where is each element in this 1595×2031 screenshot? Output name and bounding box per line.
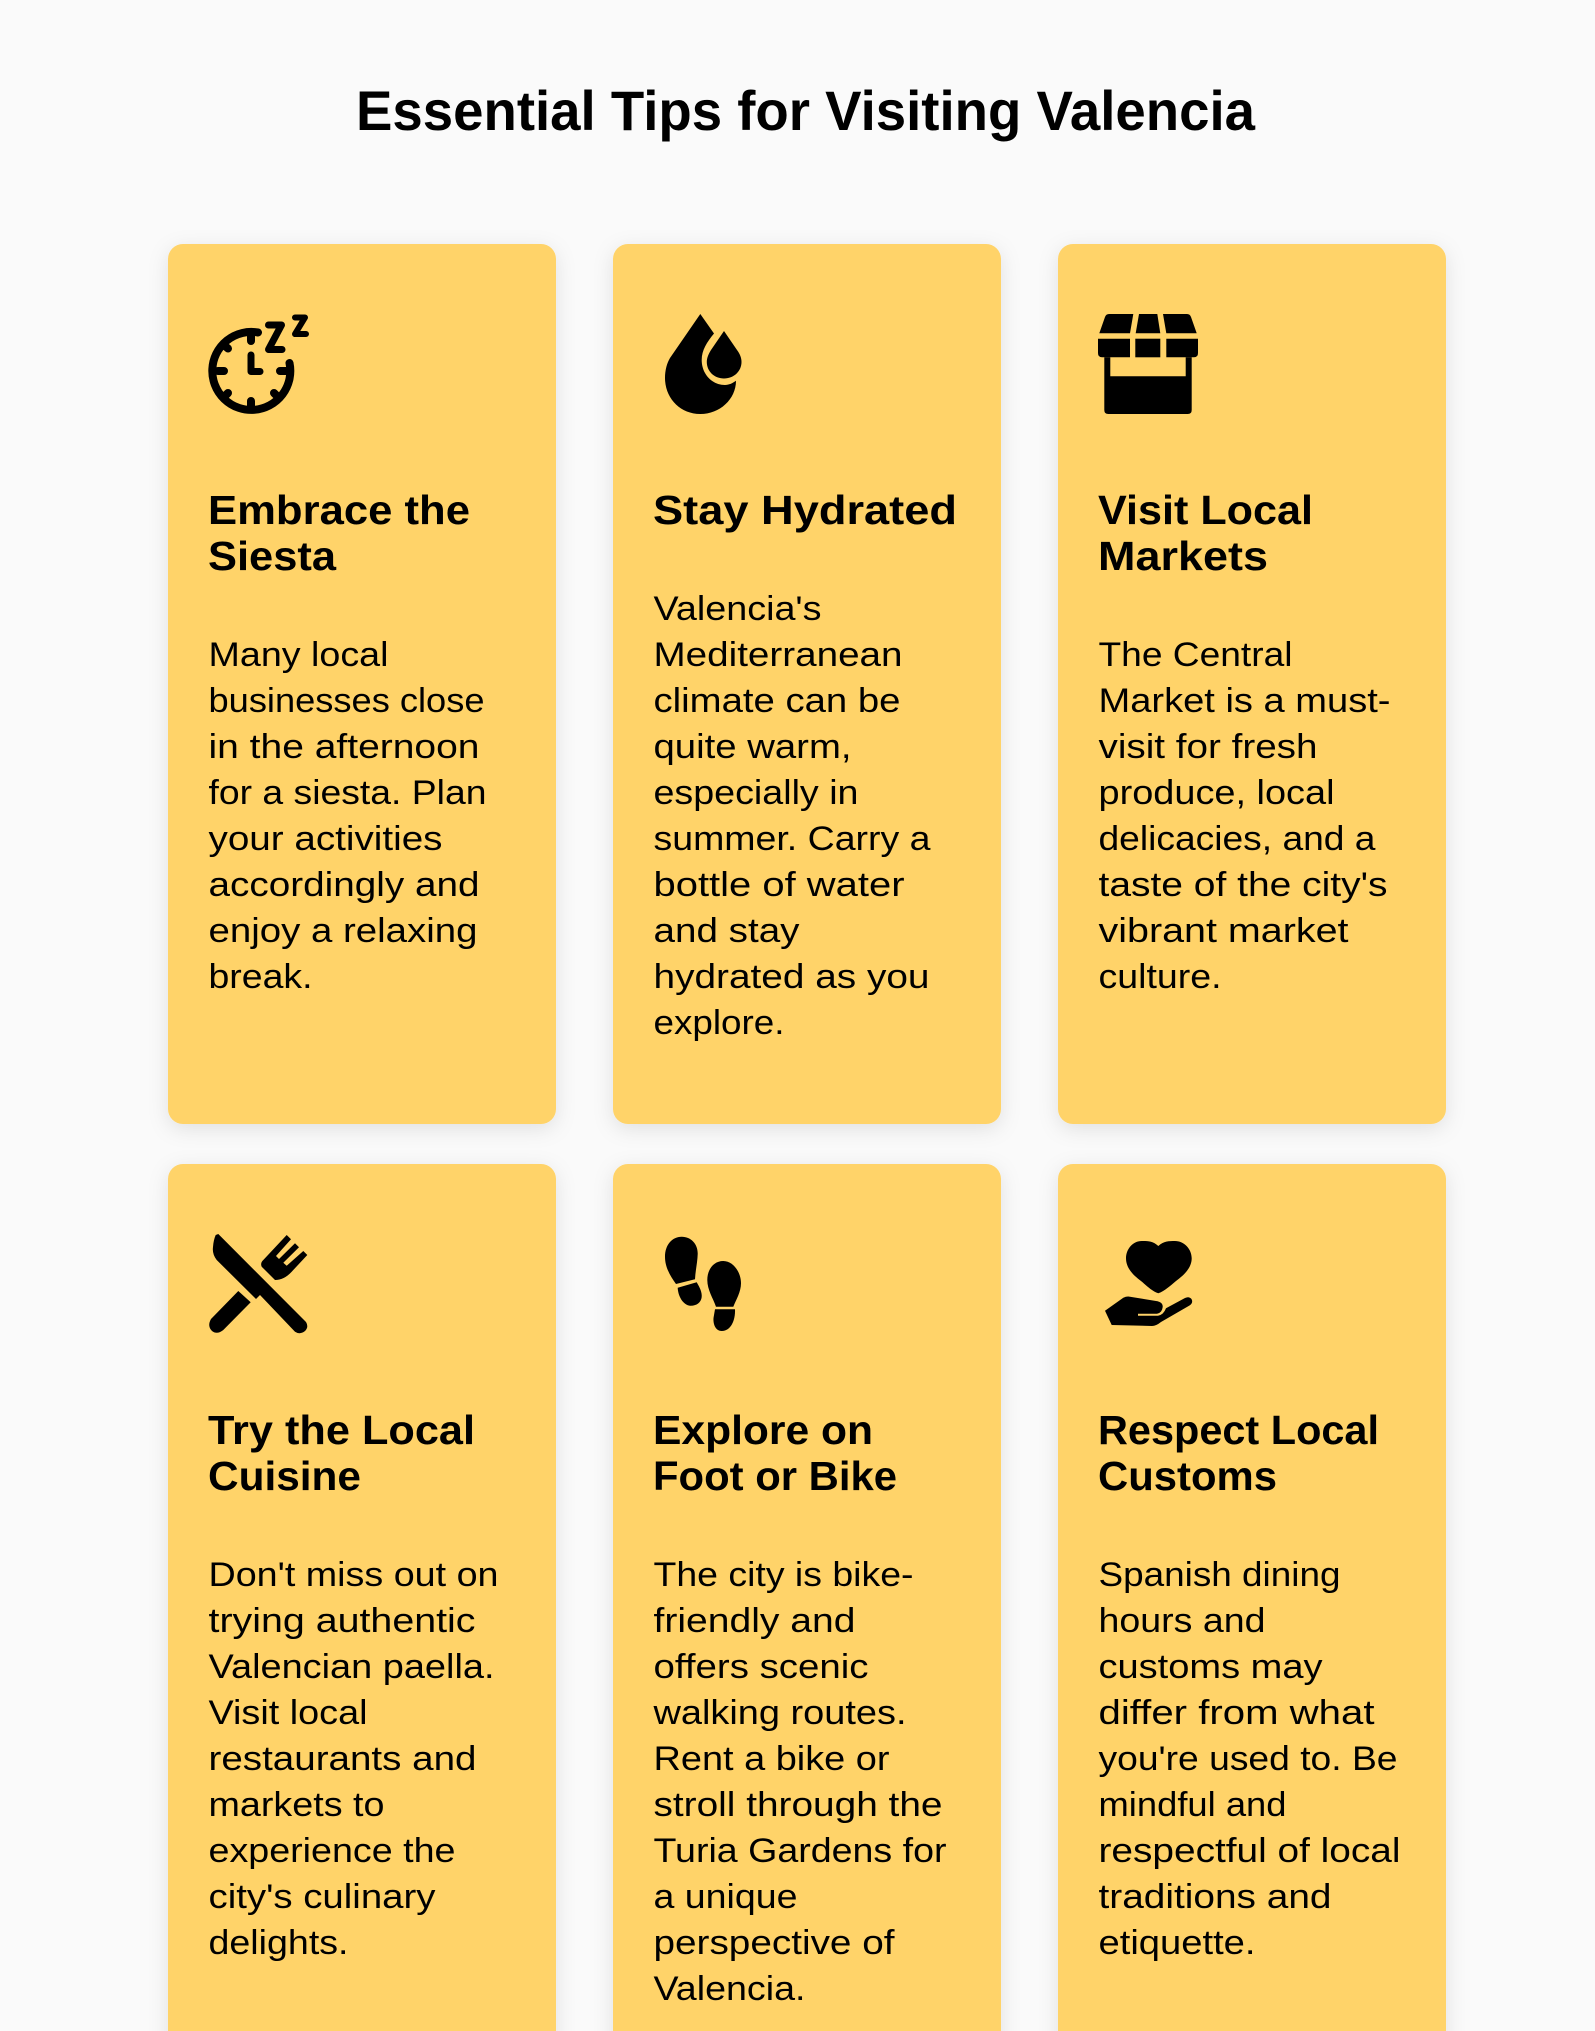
panel: Embrace the Siesta xyxy=(168,244,556,1124)
body text: The Central xyxy=(1098,636,1292,674)
heading xyxy=(1098,487,1313,579)
body text: you're used to. Be xyxy=(1098,1740,1398,1778)
body text: Valencian paella. xyxy=(208,1648,494,1686)
icon: heart in hand xyxy=(1105,1241,1192,1326)
heading xyxy=(653,1407,897,1499)
heading: Respect Local xyxy=(1098,1407,1379,1453)
body text: summer. Carry a xyxy=(654,820,931,858)
body text: delicacies, and a xyxy=(1098,820,1376,858)
body text: Visit local xyxy=(208,1694,368,1732)
body text: experience the xyxy=(208,1832,456,1870)
heading: Stay Hydrated xyxy=(653,487,957,533)
heading: Embrace the xyxy=(208,487,470,533)
body text: for a siesta. Plan xyxy=(208,774,486,812)
body text xyxy=(652,1556,946,2008)
body text: friendly and xyxy=(654,1602,856,1640)
body text: traditions and xyxy=(1098,1878,1332,1916)
body text: trying authentic xyxy=(208,1602,476,1640)
heading: Try the Local xyxy=(208,1407,475,1453)
body text: Rent a bike or xyxy=(654,1740,890,1778)
body text: climate can be xyxy=(654,682,900,720)
body text xyxy=(654,590,931,1042)
title: Essential Tips for Visiting Valencia xyxy=(356,79,1256,142)
body text: explore. xyxy=(654,1004,784,1042)
body text: Valencia. xyxy=(654,1970,806,2008)
body text: produce, local xyxy=(1098,774,1334,812)
heading xyxy=(1098,1407,1379,1499)
body text: visit for fresh xyxy=(1098,728,1318,766)
body text: Mediterranean xyxy=(654,636,902,674)
icon: water drops xyxy=(665,314,742,414)
icon: clock with zzz xyxy=(212,318,306,410)
body text xyxy=(1098,1556,1400,1962)
body text xyxy=(208,1556,498,1962)
body text: stroll through the xyxy=(654,1786,942,1824)
body text: walking routes. xyxy=(652,1694,906,1732)
body text: differ from what xyxy=(1098,1694,1375,1732)
body text: markets to xyxy=(208,1786,384,1824)
body text: Market is a must- xyxy=(1098,682,1390,720)
body text: culture. xyxy=(1098,958,1222,996)
icon: footprints xyxy=(665,1237,741,1331)
panel: Respect Local Customs xyxy=(1058,1164,1446,2031)
body text: in the afternoon xyxy=(208,728,480,766)
body text: Valencia's xyxy=(654,590,822,628)
panel: Visit Local Markets xyxy=(1058,244,1446,1124)
body text: respectful of local xyxy=(1098,1832,1400,1870)
body text: accordingly and xyxy=(208,866,480,904)
body text: and stay xyxy=(654,912,800,950)
body text: vibrant market xyxy=(1098,912,1349,950)
heading: Foot or Bike xyxy=(653,1453,897,1499)
heading: Customs xyxy=(1098,1453,1277,1499)
body text: Spanish dining xyxy=(1098,1556,1340,1594)
panel: Stay Hydrated xyxy=(613,244,1001,1124)
heading: Cuisine xyxy=(208,1453,361,1499)
body text: Don't miss out on xyxy=(208,1556,498,1594)
body text: offers scenic xyxy=(654,1648,868,1686)
body text: enjoy a relaxing xyxy=(208,912,478,950)
body text: your activities xyxy=(208,820,442,858)
heading xyxy=(208,1407,475,1499)
body text: delights. xyxy=(208,1924,348,1962)
panel: Explore on Foot or Bike xyxy=(613,1164,1001,2031)
body text: customs may xyxy=(1098,1648,1322,1686)
body text: break. xyxy=(208,958,312,996)
body text: quite warm, xyxy=(654,728,852,766)
heading: Explore on xyxy=(653,1407,873,1453)
heading xyxy=(208,487,470,579)
body text: city's culinary xyxy=(208,1878,436,1916)
body text: hydrated as you xyxy=(654,958,930,996)
body text xyxy=(208,636,486,996)
icon: knife and fork xyxy=(209,1234,307,1333)
body text: hours and xyxy=(1098,1602,1266,1640)
body text: Many local xyxy=(208,636,388,674)
body text: especially in xyxy=(654,774,858,812)
body text: taste of the city's xyxy=(1098,866,1388,904)
body text: etiquette. xyxy=(1098,1924,1256,1962)
body text: bottle of water xyxy=(654,866,904,904)
body text: Turia Gardens for xyxy=(654,1832,946,1870)
heading: Markets xyxy=(1098,533,1268,579)
heading: Visit Local xyxy=(1098,487,1313,533)
panel: Try the Local Cuisine xyxy=(168,1164,556,2031)
body text xyxy=(1098,636,1390,996)
body text: mindful and xyxy=(1098,1786,1286,1824)
body text: The city is bike- xyxy=(654,1556,914,1594)
heading: Siesta xyxy=(208,533,337,579)
body text: restaurants and xyxy=(208,1740,476,1778)
body text: businesses close xyxy=(208,682,484,720)
icon: market stall xyxy=(1098,314,1198,414)
body text: perspective of xyxy=(654,1924,895,1962)
body text: a unique xyxy=(654,1878,798,1916)
